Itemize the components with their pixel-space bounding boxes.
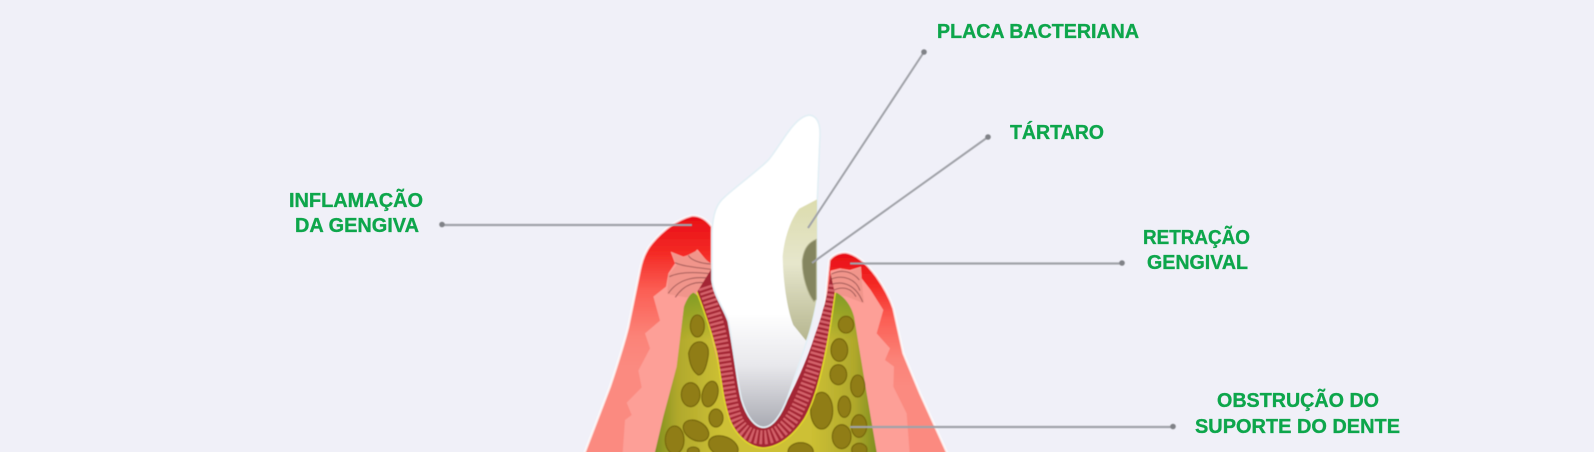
plaque <box>783 199 817 341</box>
leader line: inflamação da gengiva <box>439 222 692 227</box>
tooth crown and root <box>712 115 820 427</box>
label: retração gengival: GENGIVAL <box>1147 251 1248 274</box>
gum fibres <box>667 251 864 303</box>
leader line: obstrução do suporte do dente <box>850 424 1176 429</box>
label: retração gengival <box>1143 226 1250 274</box>
label: inflamação da gengiva: INFLAMAÇÃO <box>289 189 423 212</box>
label: obstrução do suporte do dente <box>1195 389 1400 438</box>
bone pores <box>665 315 867 452</box>
leader line: tártaro <box>812 134 991 263</box>
periodontal ligament <box>697 268 835 447</box>
right gum <box>820 252 953 452</box>
alveolar bone <box>650 293 880 452</box>
label: retração gengival: RETRAÇÃO <box>1143 226 1250 249</box>
label: tártaro: TÁRTARO <box>1010 121 1104 144</box>
tartar <box>802 239 816 302</box>
label: placa bacteriana: PLACA BACTERIANA <box>937 20 1139 43</box>
illustration: tooth with periodontitis <box>579 115 953 452</box>
label: inflamação da gengiva <box>289 189 423 237</box>
label: inflamação da gengiva: DA GENGIVA <box>295 214 419 237</box>
label: obstrução do suporte do dente: SUPORTE DO DENTE <box>1195 415 1400 438</box>
leader line: placa bacteriana <box>808 49 927 228</box>
leader line: retração gengival <box>850 260 1125 266</box>
left gum <box>579 216 733 452</box>
label: obstrução do suporte do dente: OBSTRUÇÃO DO <box>1217 389 1379 412</box>
